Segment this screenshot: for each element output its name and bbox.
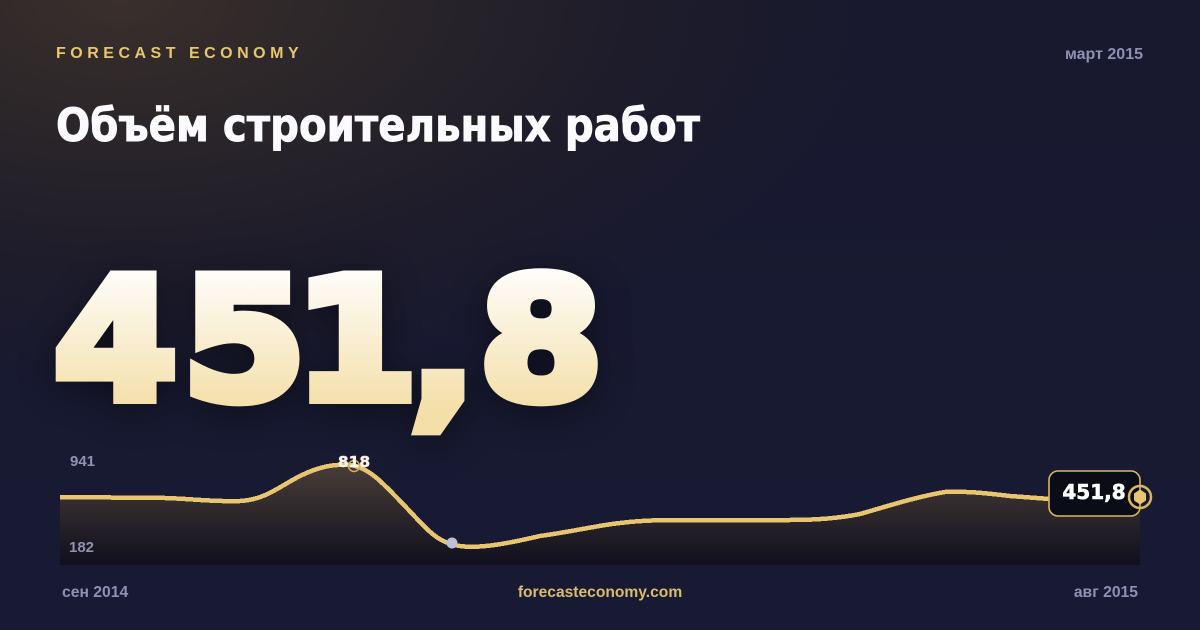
value callout: 451,8: [1062, 480, 1126, 504]
value callout: [1049, 471, 1140, 516]
title: Объём строительных работ: [56, 99, 700, 152]
big number: 451,8: [54, 242, 603, 446]
date label: март 2015: [1065, 46, 1143, 63]
brand label: FORECAST ECONOMY: [56, 45, 303, 62]
area fill: [60, 465, 1140, 565]
line: [60, 465, 1140, 547]
website: forecasteconomy.com: [518, 584, 682, 601]
axis min: 182: [69, 539, 94, 556]
end date: авг 2015: [1074, 584, 1138, 601]
start date: сен 2014: [62, 584, 128, 601]
peak marker: [348, 460, 360, 472]
low marker: [446, 538, 458, 548]
axis max: 941: [70, 453, 95, 470]
peak value: 818: [338, 453, 370, 471]
end marker: [1129, 486, 1151, 508]
